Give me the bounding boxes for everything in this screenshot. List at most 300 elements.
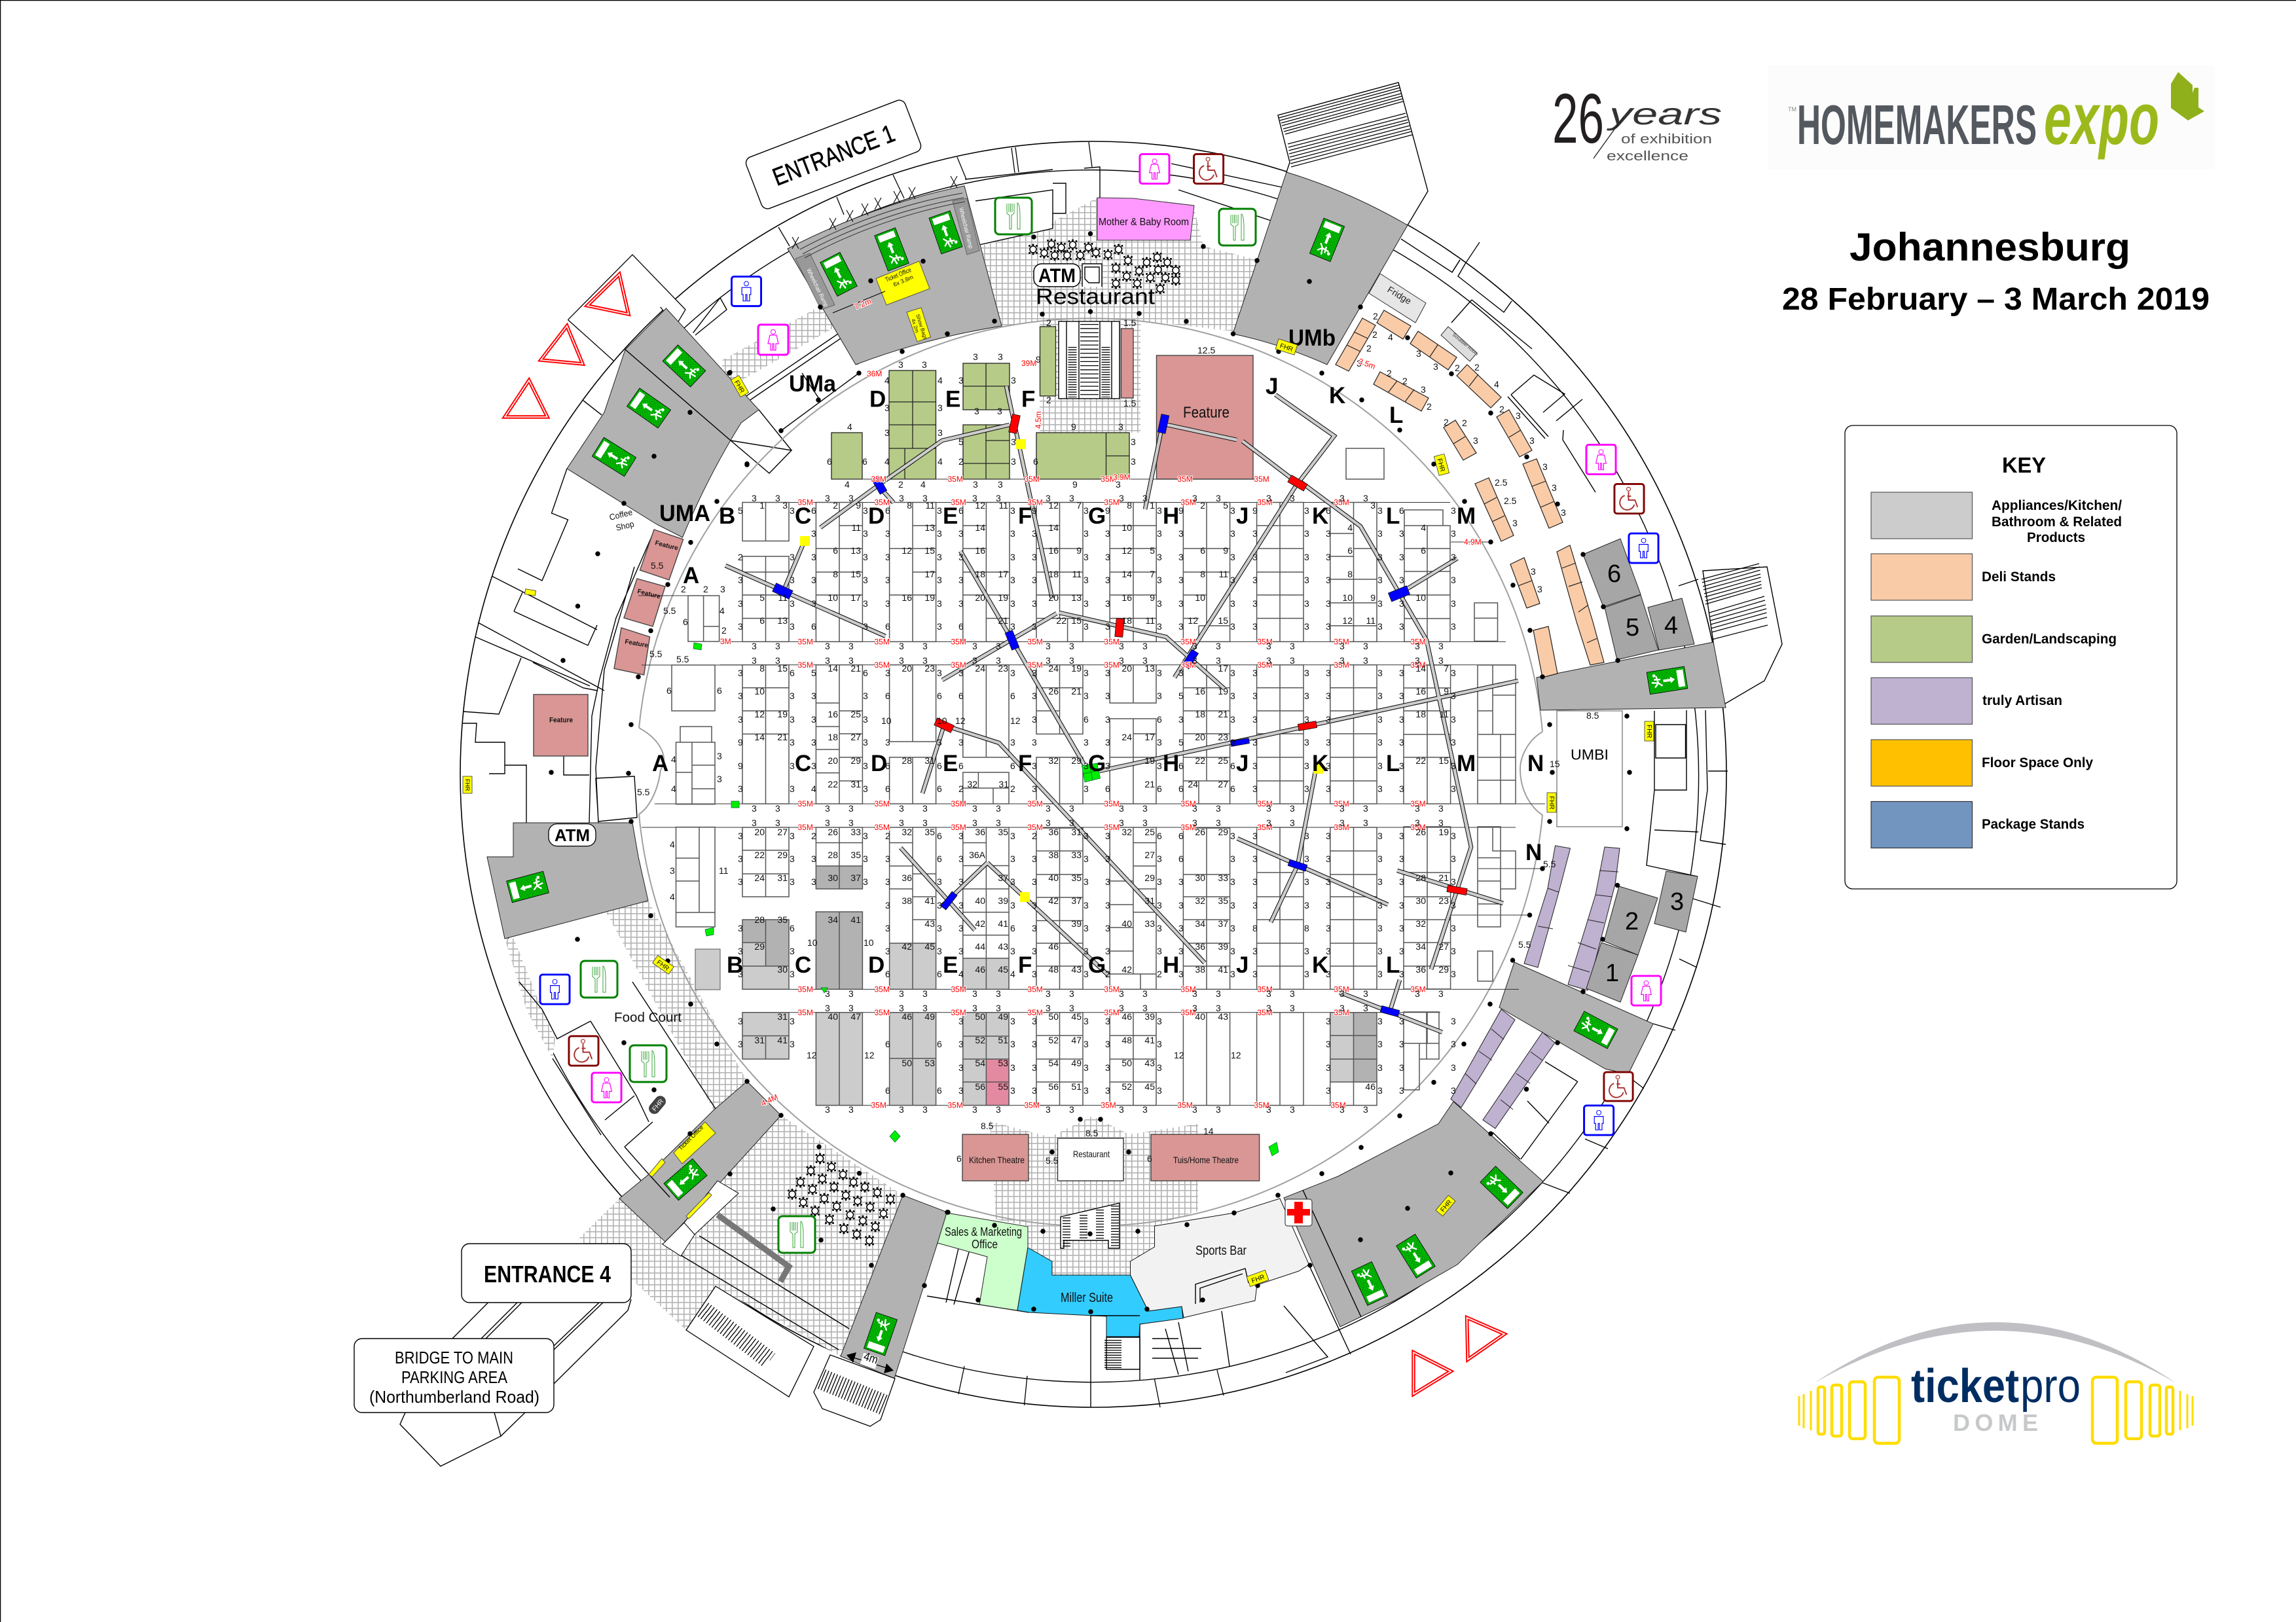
block dimension numbers: 33663333333333 <box>738 1039 1456 1049</box>
bridge to parking structure <box>400 1299 631 1466</box>
block dimension numbers: 33 <box>973 351 1003 362</box>
miller suite <box>1017 1248 1183 1337</box>
stand numbers row three: 39 <box>1071 918 1082 929</box>
block dimension numbers: 33 <box>884 427 943 438</box>
stand numbers row four: 51 <box>998 1035 1008 1045</box>
south escalators and stairs <box>1061 1203 1140 1369</box>
stand numbers row two: 23 <box>998 663 1008 674</box>
stand numbers row one: 6 <box>759 615 765 626</box>
logo: ticketpro dome: pro <box>2020 1360 2081 1413</box>
lobby: west ATM <box>487 823 648 939</box>
deli stand dimensions: 4 <box>1388 332 1393 342</box>
stand numbers row one: 20 <box>1048 592 1059 603</box>
stand numbers row two: 16 <box>1415 686 1426 696</box>
stand numbers row three: 46 <box>1048 941 1059 952</box>
stand numbers row one: 13 <box>1071 592 1082 603</box>
sales and marketing office <box>938 1213 1028 1310</box>
block dimension numbers <box>637 317 1560 1166</box>
row letters: D <box>868 503 884 529</box>
stand numbers row three: 37 <box>1071 895 1082 906</box>
block dimension numbers: 4 <box>720 605 725 616</box>
stand numbers row two: 10 <box>754 686 765 696</box>
stand numbers row three: 36 <box>902 873 912 883</box>
block dimension numbers: 12 <box>1010 715 1021 726</box>
stand numbers row three: 38 <box>1048 850 1059 860</box>
block dimension numbers: 363336333333883333 <box>738 923 1456 933</box>
stand numbers row three: 45 <box>924 941 935 952</box>
FHR tags: FHR <box>1436 458 1446 473</box>
stand numbers row two: 31 <box>998 779 1009 789</box>
mother and baby room: Mother & Baby Room <box>1099 217 1189 228</box>
key swatch: floor space <box>1871 740 2093 786</box>
deli stand dimensions: 2 <box>1499 404 1504 414</box>
logo: homemakers expo: HOMEMAKERS <box>1797 94 2037 156</box>
block dimension numbers: 10 <box>937 715 947 726</box>
stand numbers row two: 23 <box>924 663 935 674</box>
mesh floor zones <box>505 198 1258 1356</box>
big numbered stand labels: 1 <box>1605 960 1619 987</box>
stand numbers row one: 8 <box>907 500 912 511</box>
key swatch: package <box>1871 801 2085 848</box>
truly artisan stands <box>1451 846 1620 1128</box>
block dimension numbers: 5.5 <box>663 605 676 616</box>
stand numbers row three: 43 <box>998 941 1008 952</box>
block dimension numbers: 663333333333 <box>885 1085 1456 1096</box>
stand numbers row two: 32 <box>1048 755 1059 766</box>
block dimension numbers: 12 <box>807 1050 817 1060</box>
stand numbers row one: 10 <box>1415 592 1426 603</box>
logo: ticketpro dome: DOME <box>1953 1409 2038 1436</box>
east external stair <box>1702 564 1782 706</box>
logo: homemakers expo: TM <box>1788 106 1796 113</box>
block dimension numbers: 12 <box>864 1050 875 1060</box>
stand numbers row two: 29 <box>1071 755 1082 766</box>
stand numbers row four: 40 <box>828 1011 838 1022</box>
exit sign: north west 2 <box>627 388 671 428</box>
block dimension numbers: 12.5 <box>1197 345 1215 355</box>
exit sign: entrance 1 left <box>820 252 857 297</box>
stand numbers row three: 45 <box>998 964 1008 975</box>
stand numbers row one: 18 <box>1048 569 1059 579</box>
exit sign: west <box>507 871 549 903</box>
deli stand dimensions: 2 <box>1455 363 1460 373</box>
stand numbers row four: 41 <box>1144 1035 1155 1045</box>
stand numbers row one: 11 <box>998 500 1008 511</box>
stand numbers row two: 18 <box>1415 709 1426 719</box>
room labels: Kitchen Theatre <box>969 1155 1025 1165</box>
block dimension numbers: 9 <box>1036 354 1041 365</box>
block dimension numbers: 33 <box>884 403 943 413</box>
stand numbers row one: 4 <box>1347 522 1353 533</box>
stand numbers row two: 31 <box>850 779 861 789</box>
stand numbers row four: 48 <box>1121 1035 1132 1045</box>
stand numbers row two: 21 <box>1144 779 1155 789</box>
key swatch: floor space: Floor Space Only <box>1982 755 2093 770</box>
block dimension numbers: 33232633233663333333 <box>738 831 1456 841</box>
stand numbers row one: 8 <box>1347 569 1353 579</box>
deli stand dimensions: 2.5 <box>1495 477 1508 488</box>
row letters: L <box>1386 952 1400 978</box>
stand numbers row two: 17 <box>1218 663 1228 674</box>
exit sign: entrance 1 centre <box>875 228 909 271</box>
stand numbers row one: 12 <box>1188 615 1198 626</box>
stand numbers row one: 12 <box>1048 500 1059 511</box>
stand numbers row two: 8 <box>759 663 765 674</box>
block dimension numbers: 23333333333333333333 <box>738 552 1456 562</box>
stand numbers row four: 47 <box>1071 1035 1082 1045</box>
room labels: Tuis/Home Theatre <box>1173 1155 1239 1165</box>
stand numbers row three: 23 <box>1438 895 1449 906</box>
stand numbers row one: 7 <box>1076 500 1082 511</box>
lobby: entrance 1 <box>788 186 1002 365</box>
deli stand dimensions: 2 <box>1427 401 1432 412</box>
stand numbers row four: 56 <box>975 1081 985 1092</box>
stand numbers row one: 10 <box>828 592 838 603</box>
stand numbers row one: 2 <box>1200 500 1205 511</box>
row letters: UMb <box>1288 325 1336 351</box>
stand numbers row two: 22 <box>1415 755 1426 766</box>
stand numbers row one: 11 <box>925 500 935 511</box>
entrance 1 lobby items: 4x 2m <box>910 318 920 334</box>
fridge: Fridge <box>1385 284 1413 306</box>
stand numbers row two: 9 <box>1444 686 1449 696</box>
stand numbers row three: 32 <box>902 827 912 837</box>
block dimension numbers: 12 <box>1174 1050 1184 1060</box>
ATM north: ATM <box>1038 265 1076 287</box>
stand numbers row three: 26 <box>1195 827 1205 837</box>
room labels: Feature <box>549 716 573 724</box>
deli stand dimensions: 2 <box>1366 343 1372 353</box>
stand numbers row two: 24 <box>975 663 985 674</box>
stand numbers row one: 6 <box>1347 545 1353 556</box>
aisle rows base lines <box>638 479 1545 1106</box>
deli stand dimensions: 2 <box>1373 311 1378 321</box>
exit sign: south east 1 <box>1351 1262 1388 1305</box>
block dimension numbers: 3 <box>717 751 722 761</box>
stand numbers row one: 14 <box>975 522 985 533</box>
block dimension numbers: 1.5 <box>1123 398 1137 408</box>
stand numbers row three: 32 <box>1195 895 1205 906</box>
feature: west stack 3 <box>614 628 649 675</box>
stand numbers row one: 4 <box>1421 522 1426 533</box>
row letters: A <box>652 751 668 776</box>
block dimension numbers: 4 <box>670 892 675 902</box>
red 35M aisle labels: 35M 35M 35M 35M 35M 35M 35M <box>871 1101 1346 1110</box>
stand numbers row one: 15 <box>850 569 861 579</box>
ATM west <box>549 824 596 846</box>
entrance 1 lobby items: Ticket Office <box>884 266 913 284</box>
logo: 26 years: excellence <box>1607 149 1688 164</box>
red 35M aisle labels: 35M 35M 35M 35M 35M 35M 35M 35M 35M <box>797 660 1426 670</box>
stand numbers row one: 12 <box>1121 545 1132 556</box>
row letters: G <box>1088 751 1106 776</box>
block dimension numbers: 5.5 <box>1543 859 1556 869</box>
entrance 4 label: ENTRANCE 4 <box>484 1261 611 1288</box>
block dimension numbers: 6 <box>683 617 688 627</box>
stand numbers row four: 46 <box>1121 1011 1132 1022</box>
stand numbers row two: 27 <box>850 732 861 742</box>
room labels: Feature <box>654 539 679 552</box>
FHR tags: FHR <box>1279 342 1294 353</box>
row letters: F <box>1018 503 1032 529</box>
block dimension numbers: 33333333333333333333 <box>752 641 1444 651</box>
row letters: E <box>943 751 958 776</box>
block dimension numbers: 93333333333353333333 <box>738 737 1456 748</box>
lobby: north east UMb <box>1233 172 1408 365</box>
room labels: Food Court <box>614 1011 682 1025</box>
entrance 1 label <box>744 98 922 211</box>
row letters: UMa <box>789 371 837 397</box>
stand numbers row four: 49 <box>1071 1058 1082 1068</box>
row letters: J <box>1236 503 1248 529</box>
exit sign: south east 2 <box>1396 1234 1435 1278</box>
block dimension numbers: 3 <box>670 865 675 876</box>
grey lobbies <box>487 172 1726 1379</box>
restaurant label north: Restaurant <box>1036 285 1156 310</box>
stand numbers row two: 21 <box>850 663 861 674</box>
stand numbers row four: 54 <box>1048 1058 1059 1068</box>
title: dates: 28 February – 3 March 2019 <box>1782 282 2210 317</box>
restaurant tables north <box>1029 240 1180 293</box>
stand numbers row two: 19 <box>1144 755 1155 766</box>
stand numbers row one: 11 <box>1218 569 1228 579</box>
panel: key <box>1845 425 2177 889</box>
exit sign: south east 3 <box>1480 1166 1523 1208</box>
key swatch: appliances: Bathroom & Related <box>1992 514 2122 530</box>
block dimension numbers: 4 <box>671 784 676 794</box>
stand numbers row two: 12 <box>754 709 765 719</box>
row letters: L <box>1386 751 1400 776</box>
deli stand dimensions: 2 <box>1372 329 1377 340</box>
block dimension numbers: 10 <box>864 937 874 948</box>
lobby: north west UMA <box>567 308 759 537</box>
block dimension numbers: 10 <box>881 715 892 726</box>
stand numbers row one: 16 <box>1121 592 1132 603</box>
FHR tags: FHR <box>655 959 670 973</box>
stand numbers row four: 49 <box>924 1011 935 1022</box>
room labels: Office <box>972 1238 998 1251</box>
row letters: H <box>1163 952 1179 978</box>
stand numbers row three: 33 <box>850 827 861 837</box>
stand numbers row four: 31 <box>754 1035 765 1045</box>
stand numbers row three: 34 <box>1415 941 1426 952</box>
stand numbers row one: 9 <box>1370 592 1376 603</box>
key swatch: package: Package Stands <box>1982 817 2085 832</box>
stand numbers row three: 33 <box>1144 918 1155 929</box>
deli stand dimensions: 3 <box>1421 384 1426 395</box>
stand numbers row three: 35 <box>850 850 861 860</box>
stand numbers row three: 29 <box>1218 827 1228 837</box>
logo: 26 years: 26 <box>1552 79 1604 158</box>
stand numbers row four: 31 <box>777 1011 788 1022</box>
stand numbers row two: 24 <box>1121 732 1132 742</box>
row letters: K <box>1312 503 1328 529</box>
stand numbers row four: 46 <box>902 1011 912 1022</box>
stand numbers row three: 40 <box>975 895 985 906</box>
stand numbers row two: 29 <box>850 755 861 766</box>
stand numbers row two: 31 <box>924 755 935 766</box>
stand numbers row two: 19 <box>777 709 788 719</box>
stand numbers row one: 11 <box>851 522 861 533</box>
stand grid outlines <box>672 448 1498 927</box>
male toilet icons <box>540 277 1658 1135</box>
stand numbers row three: 42 <box>1121 964 1132 975</box>
bridge label: (Northumberland Road) <box>369 1387 539 1407</box>
exit sign: north west 3 <box>592 437 636 477</box>
block dimension numbers: 8.5 <box>981 1121 994 1131</box>
stand numbers row three: 27 <box>1438 941 1449 952</box>
food icons <box>581 198 1256 1253</box>
room labels: Feature <box>636 588 661 601</box>
block dimension numbers: 53636363939393936363 <box>738 505 1456 516</box>
stand numbers row one: 8 <box>1127 500 1132 511</box>
red 35M aisle labels: 4.9M <box>1464 537 1482 547</box>
room labels: Sports Bar <box>1195 1244 1247 1258</box>
yellow rigging points <box>800 439 1323 902</box>
red 35M aisle labels: 35M 35M 35M 35M 35M 35M 35M 35M 35M <box>797 638 1426 647</box>
red 35M aisle labels: 35M 35M 35M 35M 35M 35M 35M 35M <box>797 497 1349 507</box>
deli stand dimensions: 2 <box>1444 417 1449 427</box>
block dimension numbers: 3333363633333333 <box>738 714 1456 725</box>
stand numbers row two: 20 <box>1121 663 1132 674</box>
row letters: C <box>795 952 811 978</box>
stand numbers row two: 14 <box>754 732 765 742</box>
stand numbers row three: 30 <box>1415 895 1426 906</box>
stand numbers row three: 25 <box>1144 827 1155 837</box>
red 35M aisle labels: 4.4M <box>759 1092 779 1108</box>
red 35M aisle labels: 4.5m <box>1034 411 1043 429</box>
block dimension numbers: 3 <box>717 774 722 784</box>
deli stand dimensions: 3 <box>1357 358 1362 369</box>
stand numbers row three: 29 <box>754 941 765 952</box>
block dimension numbers: 33 <box>898 359 927 370</box>
stand numbers row one: 13 <box>850 545 861 556</box>
aisle trusses <box>725 386 1518 1032</box>
ATM north <box>1034 264 1102 287</box>
stand numbers row three: 31 <box>777 873 788 883</box>
stand numbers row two: 20 <box>828 755 838 766</box>
block dimension numbers: 2 <box>721 625 727 636</box>
row letters: G <box>1088 952 1106 978</box>
row letters: F <box>1018 952 1032 978</box>
restaurant tables south west <box>788 1154 894 1245</box>
stand numbers row four: 53 <box>924 1058 935 1068</box>
stand numbers row three: 33 <box>1218 873 1228 883</box>
scrubber room: Scrubber Room <box>1451 333 1479 357</box>
stand numbers row three: 35 <box>998 827 1008 837</box>
stand numbers row two: 18 <box>828 732 838 742</box>
stand numbers row one: 20 <box>975 592 985 603</box>
stand numbers row three: 33 <box>1071 850 1082 860</box>
block dimension numbers: 2 <box>1046 395 1051 405</box>
row letters: B <box>727 952 743 978</box>
stand numbers row three: 34 <box>828 914 838 925</box>
deli stand dimensions: 3 <box>1516 410 1521 421</box>
deli stand dimensions: 3 <box>1512 518 1518 528</box>
FHR tags: FHR <box>733 379 746 395</box>
block dimension numbers: 11 <box>719 865 729 876</box>
stand numbers row four: 54 <box>975 1058 985 1068</box>
stand numbers row three: 41 <box>924 895 935 906</box>
stand numbers row three: 26 <box>1415 827 1426 837</box>
block dimension numbers: 33333333333333333333 <box>752 655 1444 666</box>
block dimension numbers: 33 <box>974 406 1002 416</box>
block dimension numbers: 33336666333353333333 <box>738 691 1456 701</box>
stand numbers row four: 50 <box>902 1058 912 1068</box>
stand numbers row three: 36 <box>1048 827 1059 837</box>
stand numbers row two: 14 <box>828 663 838 674</box>
lobby: south east <box>1284 1102 1543 1327</box>
row letters: N <box>1527 751 1544 776</box>
key swatch: artisan: truly Artisan <box>1982 693 2062 708</box>
stand numbers row one: 10 <box>1121 522 1132 533</box>
stand numbers row one: 9 <box>1150 592 1155 603</box>
stand numbers row one: 8 <box>1200 569 1205 579</box>
exit sign: south west <box>664 1159 707 1200</box>
block dimension numbers: 33333633333363333333 <box>738 854 1456 864</box>
deli stand dimensions: 3 <box>1561 507 1566 518</box>
FHR tags: FHR <box>464 779 471 791</box>
stand numbers row four: 50 <box>975 1011 985 1022</box>
stand numbers row three: 31 <box>1144 895 1155 906</box>
stand numbers row two: 17 <box>1144 732 1155 742</box>
stand numbers row three: 29 <box>1438 964 1449 975</box>
ATM west: ATM <box>555 825 590 845</box>
stand numbers row two: 18 <box>1195 709 1205 719</box>
stand numbers row three: 20 <box>754 827 765 837</box>
room labels: Shop <box>615 519 635 533</box>
stand numbers row one: 1 <box>759 500 765 511</box>
first aid cross <box>1285 1199 1312 1226</box>
exit sign: entrance 1 right <box>929 211 962 254</box>
stand numbers row three: 37 <box>850 873 861 883</box>
north east external stair <box>1278 82 1428 225</box>
feature: west large <box>534 694 588 756</box>
stand numbers row two: 16 <box>828 709 838 719</box>
stand numbers row three: 29 <box>1144 873 1155 883</box>
row letters: G <box>1088 503 1106 529</box>
stand numbers row four: 41 <box>777 1035 788 1045</box>
stand numbers row three: 21 <box>1438 873 1449 883</box>
block dimension numbers: 1.5 <box>1123 317 1137 328</box>
stand numbers row three: 35 <box>1218 895 1228 906</box>
row letters: E <box>943 503 958 529</box>
stand numbers row one: 13 <box>777 615 788 626</box>
block dimension numbers: 12 <box>955 715 966 726</box>
row letters: L <box>1389 403 1403 428</box>
stand numbers row one: 21 <box>998 615 1008 626</box>
bridge label <box>354 1339 554 1413</box>
key swatch: appliances <box>1871 492 2122 545</box>
4m width arrow <box>847 1350 894 1373</box>
row letters: C <box>795 503 811 529</box>
stand numbers row three: 28 <box>828 850 838 860</box>
row letters: J <box>1236 952 1248 978</box>
stand numbers row two: 24 <box>1188 779 1198 789</box>
stand numbers row three: 37 <box>998 873 1008 883</box>
stand numbers row three: 37 <box>1218 918 1228 929</box>
logo: ticketpro dome: ticket <box>1911 1360 2019 1413</box>
row letters: A <box>683 563 699 588</box>
stand numbers row four: 52 <box>1048 1035 1059 1045</box>
stand numbers row three: 48 <box>1048 964 1059 975</box>
block dimension numbers: 4 <box>670 839 675 850</box>
stand numbers row one: 17 <box>924 569 935 579</box>
block dimension numbers: 4243393 <box>845 479 1121 490</box>
block dimension numbers: 5.5 <box>1518 939 1531 950</box>
stand numbers row two: 7 <box>1444 663 1449 674</box>
west and north rooms wall lines <box>463 164 1282 823</box>
